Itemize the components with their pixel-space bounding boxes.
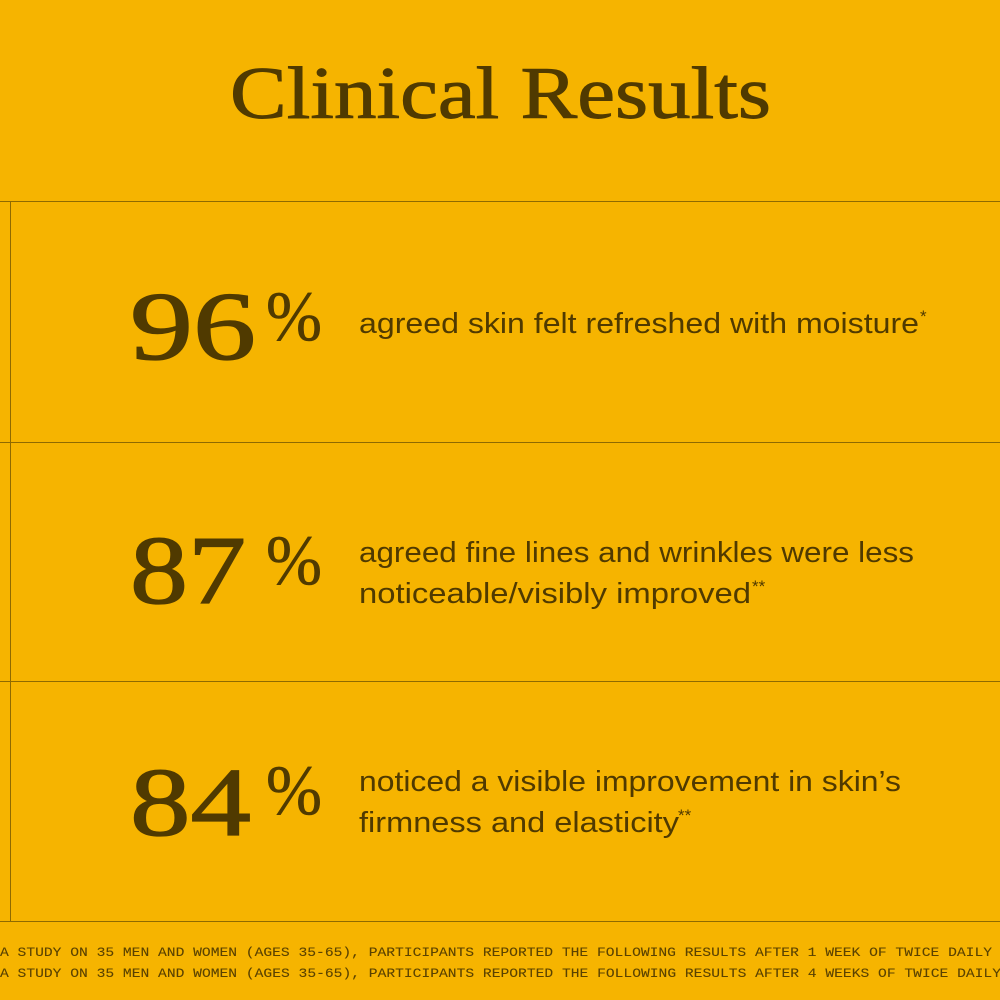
percent sign: % bbox=[266, 752, 322, 830]
percent sign: % bbox=[266, 522, 322, 600]
stat: 96: 96 bbox=[130, 273, 256, 381]
description line 1: agreed fine lines and wrinkles were less bbox=[359, 537, 914, 569]
title: Clinical Results bbox=[230, 53, 771, 135]
description: agreed skin felt refreshed with moisture bbox=[359, 308, 919, 340]
stat: 84: 84 bbox=[130, 749, 251, 857]
stat: 87: 87 bbox=[130, 517, 246, 625]
footnote mark: ** bbox=[752, 577, 766, 596]
percent sign: % bbox=[266, 278, 322, 356]
panel: 84 percent result bbox=[130, 749, 901, 857]
description line 2: noticeable/visibly improved bbox=[359, 578, 751, 610]
footnotes bbox=[0, 945, 1000, 981]
footnote mark: ** bbox=[678, 806, 692, 825]
panel: 87 percent result bbox=[130, 517, 914, 625]
footnote line 2: A STUDY ON 35 MEN AND WOMEN (AGES 35-65), PARTICIPANTS REPORTED THE FOLLOWING RESULTS AFTER 4 WEEKS OF TWICE DAILY bbox=[0, 966, 1000, 981]
panel: 96 percent result bbox=[130, 273, 927, 381]
footnote mark: * bbox=[920, 307, 927, 326]
description line 2: firmness and elasticity bbox=[359, 807, 680, 839]
footnote line 1: A STUDY ON 35 MEN AND WOMEN (AGES 35-65), PARTICIPANTS REPORTED THE FOLLOWING RESULTS AFTER 1 WEEK OF TWICE DAILY bbox=[0, 945, 992, 960]
description line 1: noticed a visible improvement in skin’s bbox=[359, 766, 901, 798]
